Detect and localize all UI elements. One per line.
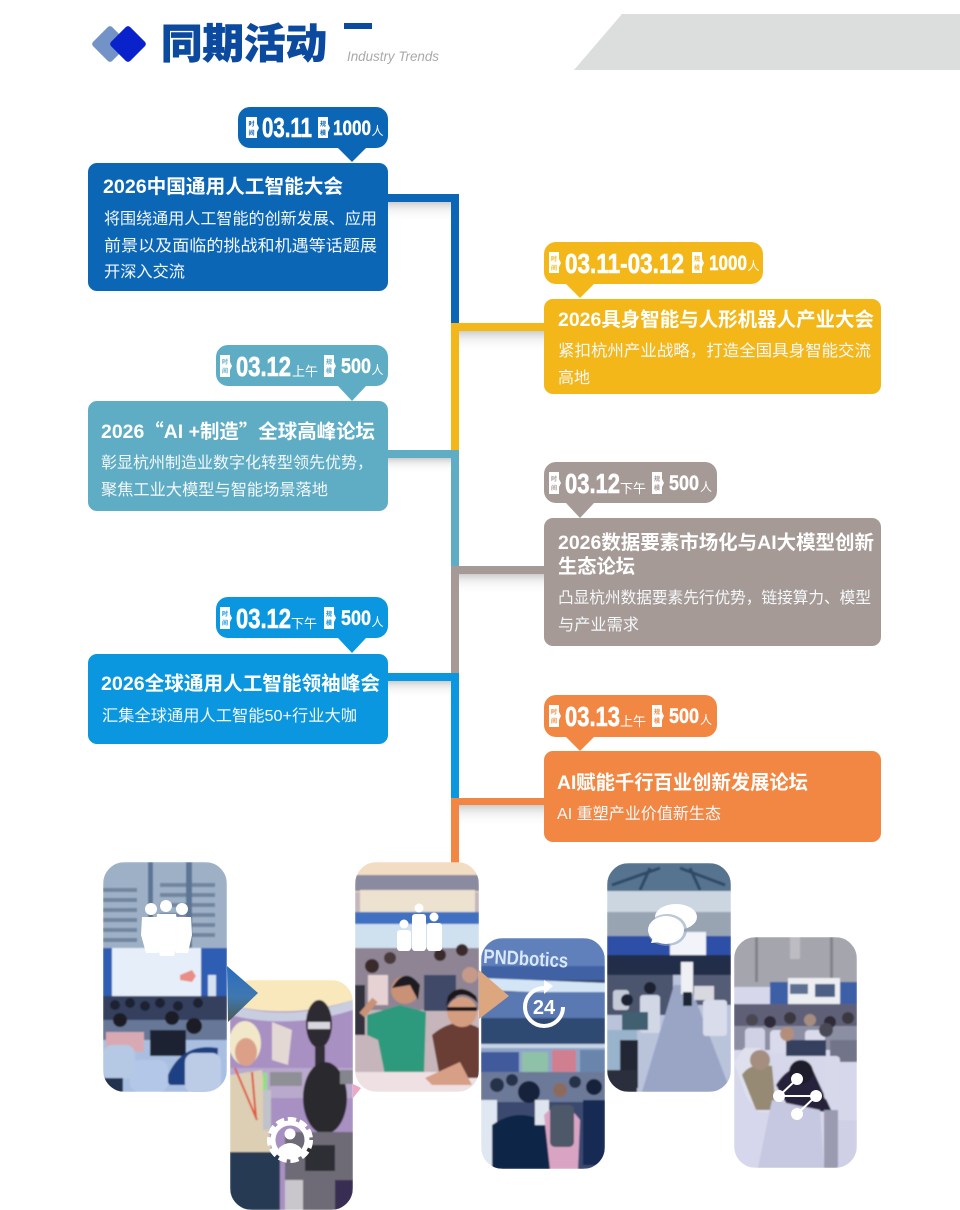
arrow tip [227, 966, 258, 1022]
photo: robot and visitor with gear icon [229, 980, 361, 1210]
info card: 2026“AI +制造”全球高峰论坛 [101, 415, 375, 444]
arrow tip [353, 1084, 361, 1098]
date badge: 人 [372, 363, 384, 377]
date badge: 间 [551, 717, 557, 725]
photo: delegates with podium icon [355, 862, 509, 1092]
date badge: 间 [551, 264, 557, 272]
date badge: 规 [694, 255, 700, 263]
info card: 凸显杭州数据要素先行优势，链接算力、模型 [558, 588, 871, 607]
section header [91, 21, 439, 67]
icon: 24-hour arrow circle: 24 [533, 997, 556, 1019]
timeline connector [388, 194, 544, 866]
date badge: 间 [222, 367, 228, 375]
heading: 同期活动 [161, 21, 327, 67]
info card: 前景以及面临的挑战和机遇等话题展 [104, 237, 377, 255]
date badge: 人 [700, 713, 712, 727]
date badge: 模 [326, 367, 332, 375]
info card: 高地 [558, 369, 590, 387]
date badge: 间 [222, 619, 228, 627]
info card: 聚焦工业大模型与智能场景落地 [101, 481, 328, 499]
info card [544, 299, 881, 394]
date badge: 03.11 [262, 112, 312, 143]
panel: 2026全球通用人工智能领袖峰会 [88, 597, 388, 744]
date badge: 人 [748, 259, 760, 273]
date badge: 间 [248, 129, 255, 137]
date badge: 时 [222, 358, 228, 366]
info card [88, 401, 388, 511]
heading accent dash [344, 23, 372, 29]
subheading: Industry Trends [347, 49, 439, 64]
info card: 生态论坛 [558, 555, 635, 578]
info card: 彰显杭州制造业数字化转型领先优势， [101, 453, 373, 472]
info card [544, 751, 881, 842]
date badge: 03.12 [236, 351, 291, 382]
date badge [544, 462, 717, 518]
date badge: 规 [326, 358, 332, 366]
date badge [544, 242, 763, 298]
info card [544, 518, 881, 646]
date badge: 1000 [333, 117, 371, 140]
sign lettering: PNDbotics [483, 946, 569, 972]
date badge: 模 [694, 264, 700, 272]
date badge: 03.13 [565, 701, 620, 732]
icon: overlapping diamonds [91, 25, 147, 63]
date badge: 时 [551, 475, 557, 483]
icon: three people [141, 900, 192, 956]
date badge: 下午 [620, 481, 646, 496]
info card [88, 654, 388, 744]
panel: 2026具身智能与人形机器人产业大会 [544, 242, 881, 394]
info card: 汇集全球通用人工智能50+行业大咖 [102, 707, 357, 725]
panel: AI赋能千行百业创新发展论坛 [544, 695, 881, 842]
photo: entrance crowd with 24h icon [481, 938, 605, 1169]
connector: teal [388, 450, 459, 566]
info card [88, 163, 388, 291]
photo: audience aisle with chat icon [607, 863, 731, 1092]
date badge: 上午 [292, 364, 318, 379]
date badge: 时 [551, 255, 557, 263]
icon: people on podium [397, 904, 442, 951]
panel: 2026“AI +制造”全球高峰论坛 [88, 345, 388, 511]
icon: 24-hour arrow circle [525, 980, 563, 1026]
info card: 2026数据要素市场化与AI大模型创新 [558, 531, 874, 554]
date badge: 上午 [620, 714, 646, 729]
date badge [238, 107, 388, 162]
date badge: 500 [341, 607, 371, 630]
connector: blue [388, 194, 459, 323]
date badge: 间 [551, 484, 557, 492]
date badge: 时 [551, 708, 557, 716]
info card: AI赋能千行百业创新发展论坛 [557, 771, 808, 794]
info card: 开深入交流 [104, 263, 185, 281]
date badge: 模 [326, 619, 332, 627]
date badge: 时 [222, 610, 228, 618]
date badge: 模 [654, 484, 660, 492]
icon: share nodes [774, 1074, 822, 1120]
date badge: 03.11-03.12 [565, 248, 684, 279]
date badge: 模 [320, 129, 326, 137]
info card: 2026具身智能与人形机器人产业大会 [558, 309, 874, 331]
date badge: 1000 [709, 252, 747, 275]
date badge: 500 [341, 355, 371, 378]
top-right grey banner [574, 14, 960, 70]
panel: 2026数据要素市场化与AI大模型创新生态论坛 [544, 462, 881, 646]
date badge [216, 597, 388, 653]
date badge [544, 695, 717, 751]
info card: 2026中国通用人工智能大会 [103, 176, 343, 198]
date badge: 时 [248, 120, 255, 128]
date badge: 03.12 [236, 603, 291, 634]
date badge: 500 [669, 705, 699, 728]
photo: seminar with share icon [734, 937, 857, 1168]
info card: 2026全球通用人工智能领袖峰会 [101, 672, 380, 695]
date badge: 模 [654, 717, 660, 725]
connector: orange [451, 798, 544, 866]
icon: speech bubbles [647, 904, 697, 946]
info card: 将围绕通用人工智能的创新发展、应用 [104, 209, 377, 228]
connector: yellow [451, 323, 544, 450]
date badge: 规 [654, 475, 660, 483]
panel: 2026中国通用人工智能大会 [88, 107, 388, 291]
info card: AI 重塑产业价值新生态 [557, 805, 721, 823]
icon: gear with person [270, 1120, 310, 1160]
photo: conference stage with people icon [103, 862, 258, 1093]
date badge: 规 [654, 708, 660, 716]
date badge: 人 [700, 480, 712, 494]
date badge: 500 [669, 472, 699, 495]
date badge [216, 345, 388, 401]
date badge: 规 [326, 610, 332, 618]
connector: light blue [388, 673, 459, 798]
info card: 与产业需求 [558, 616, 639, 634]
arrow tip [479, 970, 509, 1019]
date badge: 人 [372, 615, 384, 629]
date badge: 下午 [291, 616, 317, 631]
date badge: 人 [372, 124, 384, 138]
date badge: 03.12 [565, 468, 620, 499]
connector shadows [388, 202, 544, 827]
connector: grey [451, 566, 544, 673]
date badge: 规 [320, 120, 326, 128]
info card: 紧扣杭州产业战略，打造全国具身智能交流 [558, 342, 871, 360]
